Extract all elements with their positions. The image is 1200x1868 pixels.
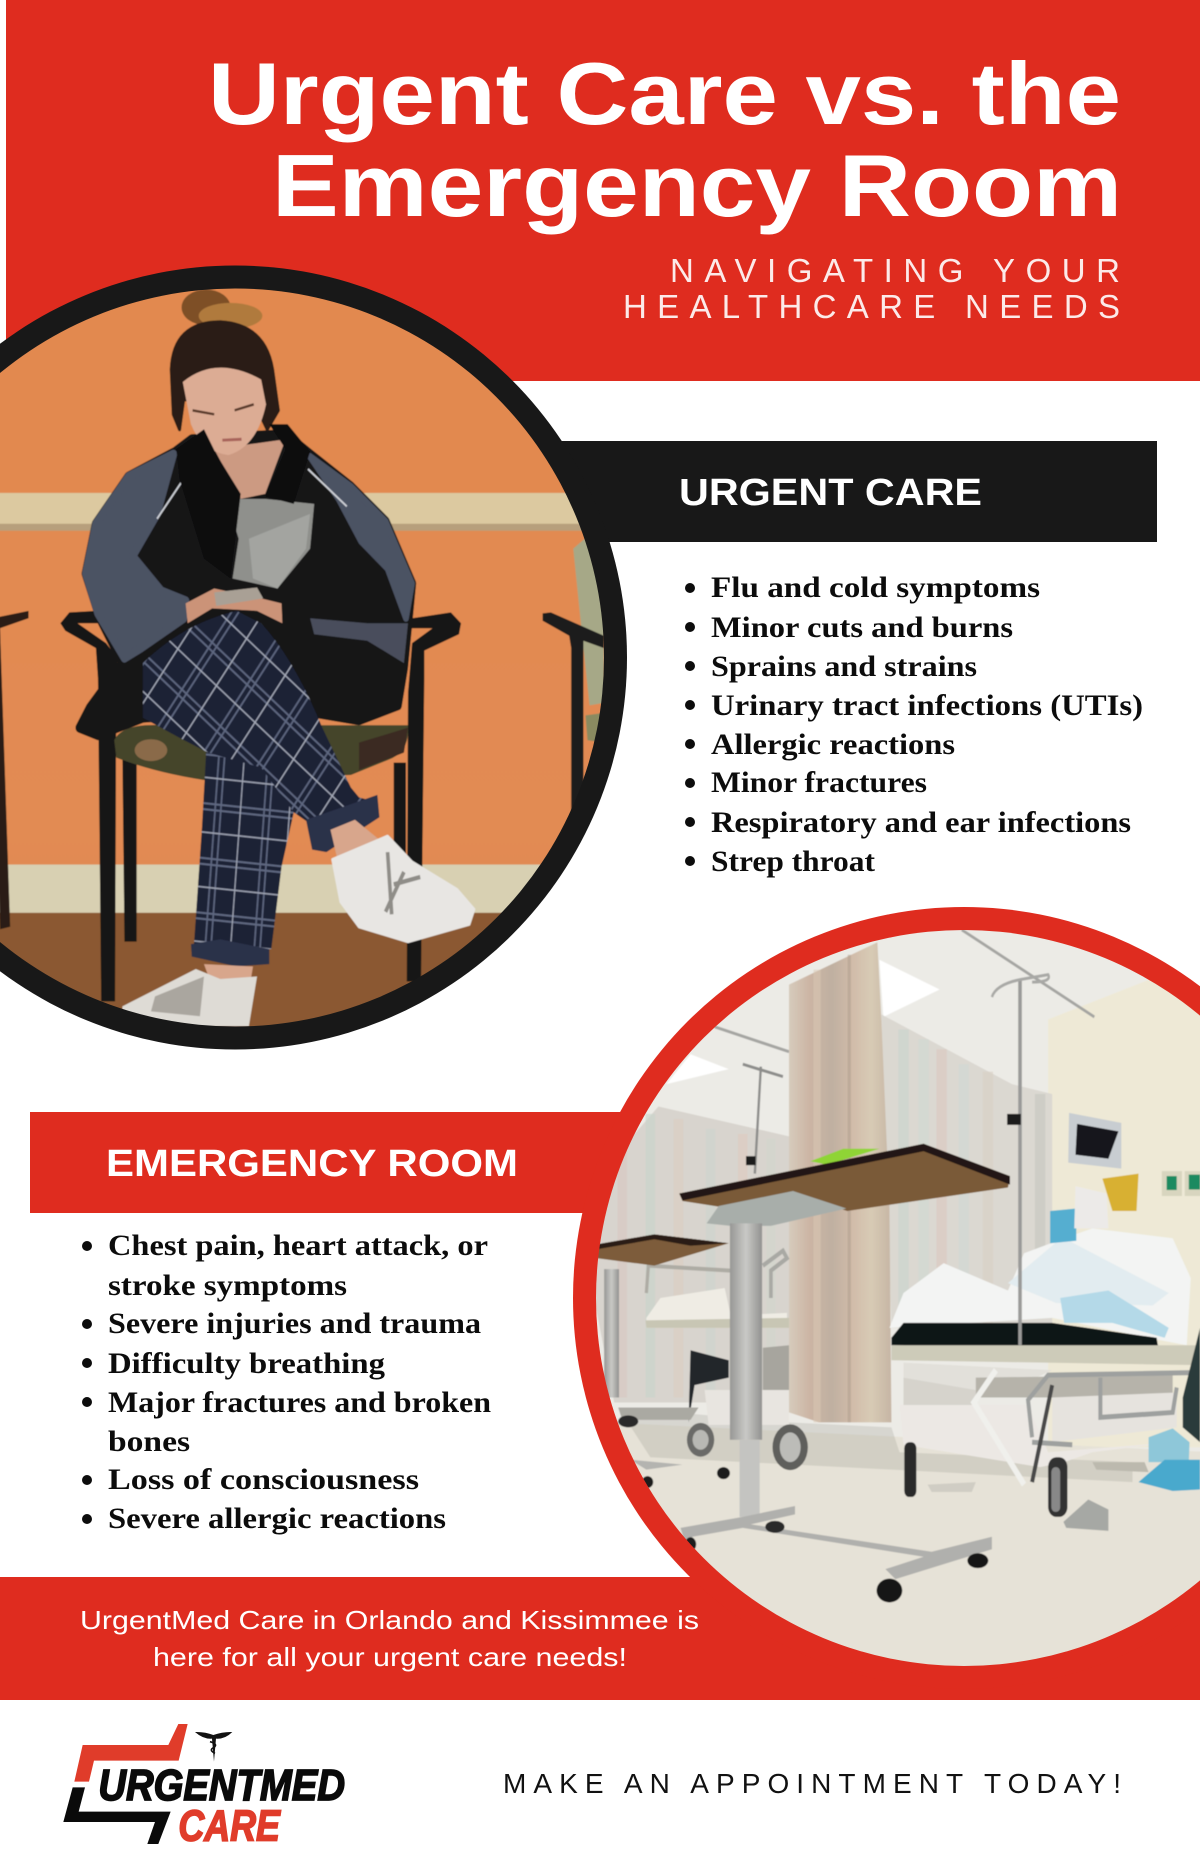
monitor bbox=[1068, 1113, 1121, 1169]
face bbox=[183, 368, 266, 455]
wall gas outlets bbox=[1162, 1171, 1182, 1196]
panel: footer call-out band bbox=[0, 1577, 1200, 1700]
blue items bbox=[1149, 1428, 1190, 1462]
back curtains bbox=[881, 1014, 1052, 1328]
call to action: MAKE AN APPOINTMENT TODAY! bbox=[503, 1768, 1121, 1799]
title bbox=[208, 44, 1122, 235]
list: emergency room conditions: Difficulty breathing bbox=[108, 1347, 385, 1380]
logo: UrgentMed Care: URGENTMED bbox=[98, 1762, 345, 1810]
pants bbox=[193, 752, 294, 950]
ankle bbox=[330, 819, 378, 856]
list: emergency room conditions: Loss of consciousness bbox=[108, 1463, 419, 1496]
jacket collar bbox=[176, 429, 241, 578]
list: emergency room conditions: Chest pain, heart attack, or bbox=[108, 1229, 488, 1262]
list: urgent care conditions: Minor fractures bbox=[711, 766, 927, 799]
hair bbox=[182, 289, 231, 325]
subtitle: HEALTHCARE NEEDS bbox=[623, 288, 1120, 325]
list: urgent care conditions: Urinary tract infections (UTIs) bbox=[711, 689, 1143, 722]
IV pole bbox=[1017, 980, 1023, 1346]
main table bbox=[810, 1149, 879, 1165]
centre curtain bbox=[789, 942, 891, 1422]
neighbour chairs bbox=[0, 611, 29, 929]
floor bbox=[618, 1423, 1200, 1666]
list: emergency room conditions: Severe allergic reactions bbox=[108, 1502, 446, 1535]
list: urgent care conditions: Sprains and strains bbox=[711, 650, 977, 683]
photo ring: woman in waiting room bbox=[0, 266, 653, 1076]
right bed linen bbox=[889, 1228, 1191, 1345]
panel: footer call-out band: UrgentMed Care in Orlando and Kissimmee is bbox=[80, 1605, 699, 1635]
subtitle bbox=[623, 252, 1120, 325]
panel: emergency room heading bar bbox=[30, 1112, 650, 1213]
back bed bbox=[646, 1288, 787, 1321]
bed frame bbox=[903, 1438, 1148, 1468]
logo: UrgentMed Care: CARE bbox=[178, 1803, 281, 1851]
list: emergency room conditions: bones bbox=[108, 1425, 190, 1458]
logo: UrgentMed Care bbox=[63, 1724, 345, 1851]
photo ring: hospital emergency room bbox=[570, 900, 1200, 1696]
title: Urgent Care vs. the bbox=[208, 44, 1121, 143]
panel: footer call-out band: here for all your urgent care needs! bbox=[153, 1642, 627, 1672]
chair bbox=[60, 611, 461, 1001]
shirt bbox=[232, 498, 315, 589]
list: emergency room conditions: stroke symptoms bbox=[108, 1269, 347, 1302]
list: urgent care conditions: Allergic reactions bbox=[711, 728, 955, 761]
jacket bbox=[80, 434, 412, 735]
panel: urgent care heading bar bbox=[540, 441, 1157, 542]
list: urgent care conditions: Respiratory and ear infections bbox=[711, 806, 1131, 839]
back table bbox=[597, 1234, 729, 1266]
header panel bbox=[6, 0, 1200, 381]
list: emergency room conditions: Major fractures and broken bbox=[108, 1386, 491, 1419]
subtitle: NAVIGATING YOUR bbox=[670, 252, 1120, 289]
list: emergency room conditions bbox=[82, 1229, 491, 1535]
shoes bbox=[333, 836, 474, 942]
list: emergency room conditions: Severe injuries and trauma bbox=[108, 1307, 481, 1340]
title: Emergency Room bbox=[272, 136, 1122, 235]
mattress bbox=[890, 1322, 1158, 1346]
panel: emergency room heading bar: EMERGENCY ROOM bbox=[106, 1143, 518, 1185]
panel: urgent care heading bar: URGENT CARE bbox=[679, 472, 982, 514]
list: urgent care conditions: Strep throat bbox=[711, 845, 875, 878]
list: urgent care conditions: Flu and cold symptoms bbox=[711, 571, 1040, 604]
hands and phone bbox=[186, 588, 282, 623]
list: urgent care conditions: Minor cuts and burns bbox=[711, 611, 1013, 644]
neck bbox=[214, 439, 286, 499]
list: urgent care conditions bbox=[685, 571, 1143, 878]
